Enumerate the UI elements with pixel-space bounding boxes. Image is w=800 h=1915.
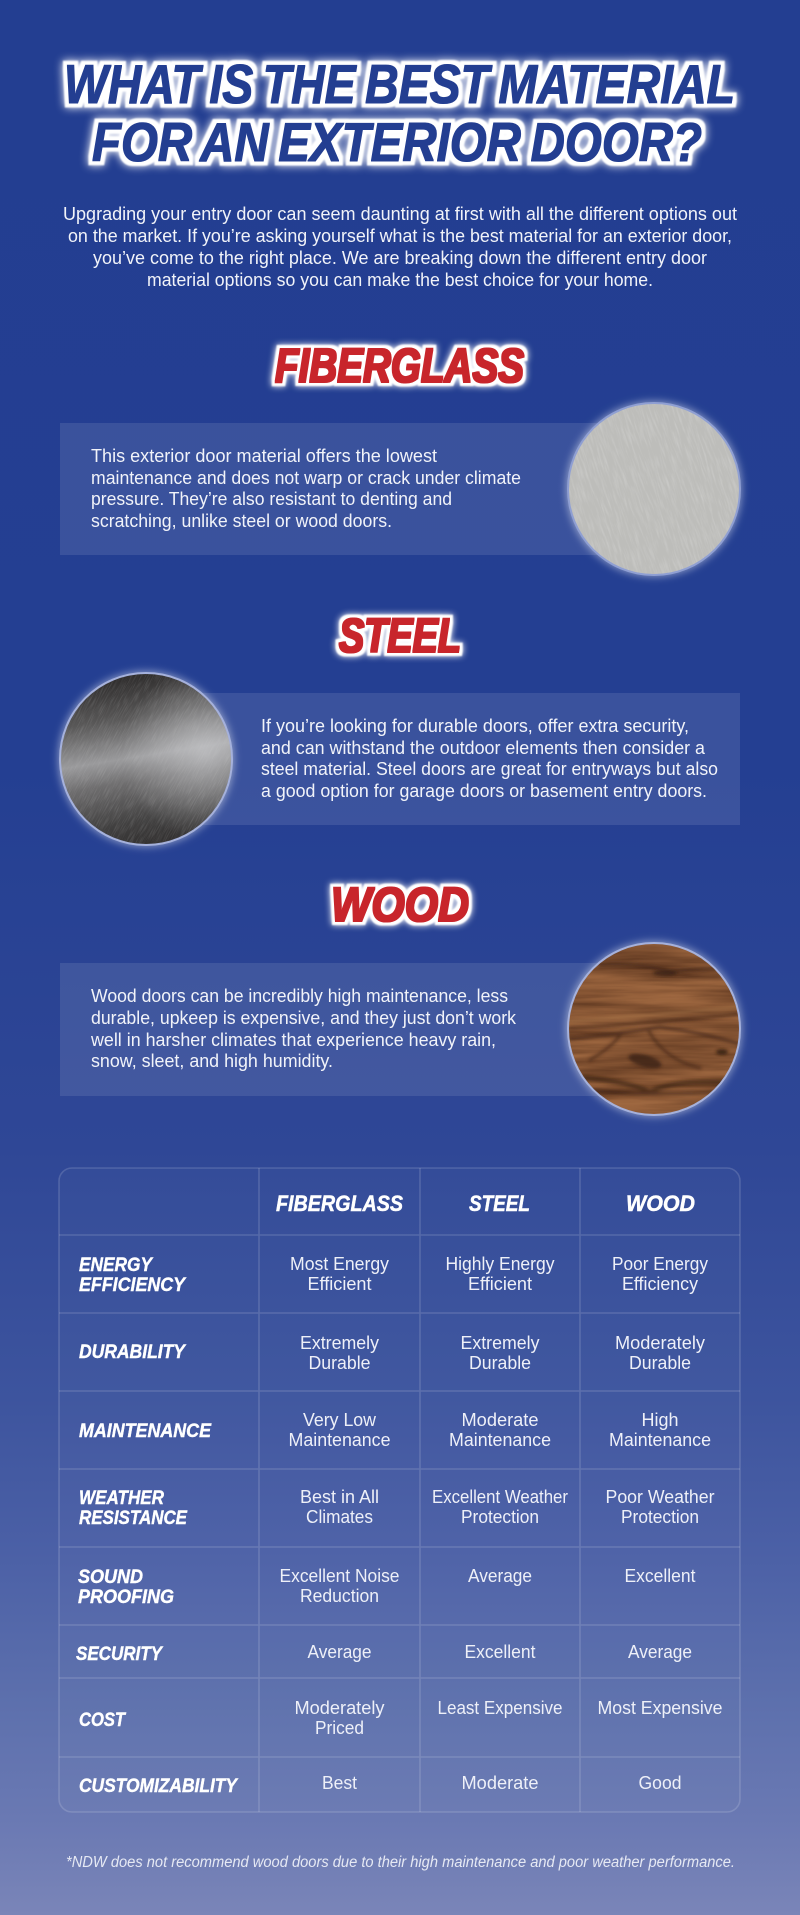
section: steel — [53, 609, 740, 852]
icon: steel texture circle — [53, 666, 239, 852]
row: durability — [79, 1333, 705, 1373]
row: weather resistance: Protection — [461, 1507, 539, 1527]
wood text: snow, sleet, and high humidity. — [91, 1050, 333, 1071]
title — [64, 53, 735, 173]
fiberglass text: This exterior door material offers the lowest — [91, 445, 437, 466]
table header row: STEEL — [469, 1191, 530, 1216]
row: maintenance — [79, 1410, 711, 1450]
row: customizability: Good — [638, 1773, 682, 1793]
row: durability: Moderately — [615, 1333, 705, 1353]
row: energy efficiency: Efficient — [468, 1274, 532, 1294]
steel text: If you’re looking for durable doors, offer extra security, — [261, 715, 689, 736]
steel text: and can withstand the outdoor elements then consider a — [261, 737, 706, 758]
row: durability: Durable — [308, 1353, 370, 1373]
intro text: you’ve come to the right place. We are breaking down the different entry door — [93, 247, 707, 268]
row: durability: Durable — [629, 1353, 691, 1373]
row: energy efficiency: ENERGY — [79, 1255, 154, 1276]
icon: fiberglass texture circle — [561, 396, 747, 582]
row: sound proofing — [78, 1566, 696, 1608]
table grid — [59, 1168, 740, 1812]
row: sound proofing: PROOFING — [78, 1587, 174, 1608]
row: maintenance: Very Low — [303, 1410, 377, 1430]
fiberglass text: maintenance and does not warp or crack under climate — [91, 467, 521, 488]
footnote: *NDW does not recommend wood doors due to their high maintenance and poor weather performance. — [66, 1854, 735, 1871]
table header row: WOOD — [626, 1191, 695, 1216]
icon: wood texture circle — [566, 941, 742, 1117]
row: weather resistance: Protection — [621, 1507, 699, 1527]
row: sound proofing: Excellent — [624, 1566, 696, 1586]
fiberglass text: scratching, unlike steel or wood doors. — [91, 510, 392, 531]
row: durability: DURABILITY — [79, 1342, 187, 1363]
row: energy efficiency: Highly Energy — [446, 1254, 554, 1274]
row: weather resistance: RESISTANCE — [79, 1508, 188, 1529]
row: cost: Moderately — [294, 1698, 384, 1718]
row: maintenance: High — [642, 1410, 678, 1430]
panel: wood description — [60, 963, 654, 1096]
row: weather resistance: Excellent Weather — [432, 1487, 568, 1507]
row: durability: Extremely — [460, 1333, 540, 1353]
wood text: durable, upkeep is expensive, and they just don’t work — [91, 1007, 517, 1028]
panel: fiberglass description — [60, 423, 654, 555]
row: maintenance: Maintenance — [449, 1430, 551, 1450]
row: energy efficiency: Efficient — [308, 1274, 372, 1294]
row: energy efficiency: EFFICIENCY — [79, 1275, 187, 1296]
title: FOR AN EXTERIOR DOOR? — [92, 111, 702, 173]
row: maintenance: Maintenance — [609, 1430, 711, 1450]
row: durability: Extremely — [300, 1333, 379, 1353]
row: durability: Durable — [469, 1353, 531, 1373]
steel text — [261, 715, 718, 801]
row: energy efficiency: Poor Energy — [612, 1254, 708, 1274]
panel: steel description — [146, 693, 740, 825]
table header row — [276, 1191, 695, 1216]
table header row: FIBERGLASS — [276, 1191, 403, 1216]
intro text: Upgrading your entry door can seem daunting at first with all the different options out — [63, 203, 737, 224]
row: security: Average — [628, 1642, 692, 1662]
row: maintenance: MAINTENANCE — [79, 1421, 212, 1442]
row: security — [76, 1642, 692, 1665]
intro text: material options so you can make the best choice for your home. — [147, 269, 653, 290]
heading: fiberglass: FIBERGLASS — [275, 340, 524, 393]
row: maintenance: Maintenance — [288, 1430, 390, 1450]
wood text: well in harsher climates that experience heavy rain, — [90, 1029, 496, 1050]
row: sound proofing: Reduction — [300, 1586, 379, 1606]
row: customizability: Best — [322, 1773, 357, 1793]
row: cost — [79, 1698, 722, 1738]
row: customizability: CUSTOMIZABILITY — [79, 1776, 239, 1797]
heading: wood: WOOD — [331, 879, 469, 932]
fiberglass text — [91, 445, 521, 531]
row: weather resistance: Poor Weather — [606, 1487, 714, 1507]
row: energy efficiency: Efficiency — [622, 1274, 698, 1294]
row: weather resistance — [79, 1487, 714, 1529]
row: weather resistance: Climates — [306, 1507, 373, 1527]
row: security: SECURITY — [76, 1644, 164, 1665]
row: energy efficiency — [79, 1254, 708, 1296]
heading: steel: STEEL — [339, 610, 461, 663]
row: sound proofing: Average — [468, 1566, 532, 1586]
row: cost: COST — [79, 1710, 126, 1731]
row: customizability: Moderate — [462, 1773, 538, 1793]
section: wood — [60, 879, 742, 1117]
row: cost: Least Expensive — [438, 1698, 562, 1718]
row: cost: Most Expensive — [598, 1698, 722, 1718]
fiberglass text: pressure. They’re also resistant to denting and — [91, 488, 452, 509]
row: security: Average — [308, 1642, 372, 1662]
row: sound proofing: SOUND — [78, 1567, 143, 1588]
steel text: a good option for garage doors or basement entry doors. — [261, 780, 707, 801]
row: weather resistance: WEATHER — [79, 1488, 164, 1509]
wood text: Wood doors can be incredibly high maintenance, less — [91, 985, 508, 1006]
row: weather resistance: Best in All — [300, 1487, 379, 1507]
row: security: Excellent — [464, 1642, 536, 1662]
row: customizability — [79, 1773, 682, 1797]
section: fiberglass — [60, 339, 747, 582]
comparison table — [59, 1168, 740, 1812]
intro text — [63, 203, 737, 290]
steel text: steel material. Steel doors are great for entryways but also — [261, 758, 718, 779]
row: energy efficiency: Most Energy — [290, 1254, 389, 1274]
row: sound proofing: Excellent Noise — [280, 1566, 400, 1586]
wood text — [90, 985, 517, 1071]
row: maintenance: Moderate — [462, 1410, 538, 1430]
row: cost: Priced — [315, 1718, 364, 1738]
intro text: on the market. If you’re asking yourself what is the best material for an exterior door, — [68, 225, 732, 246]
